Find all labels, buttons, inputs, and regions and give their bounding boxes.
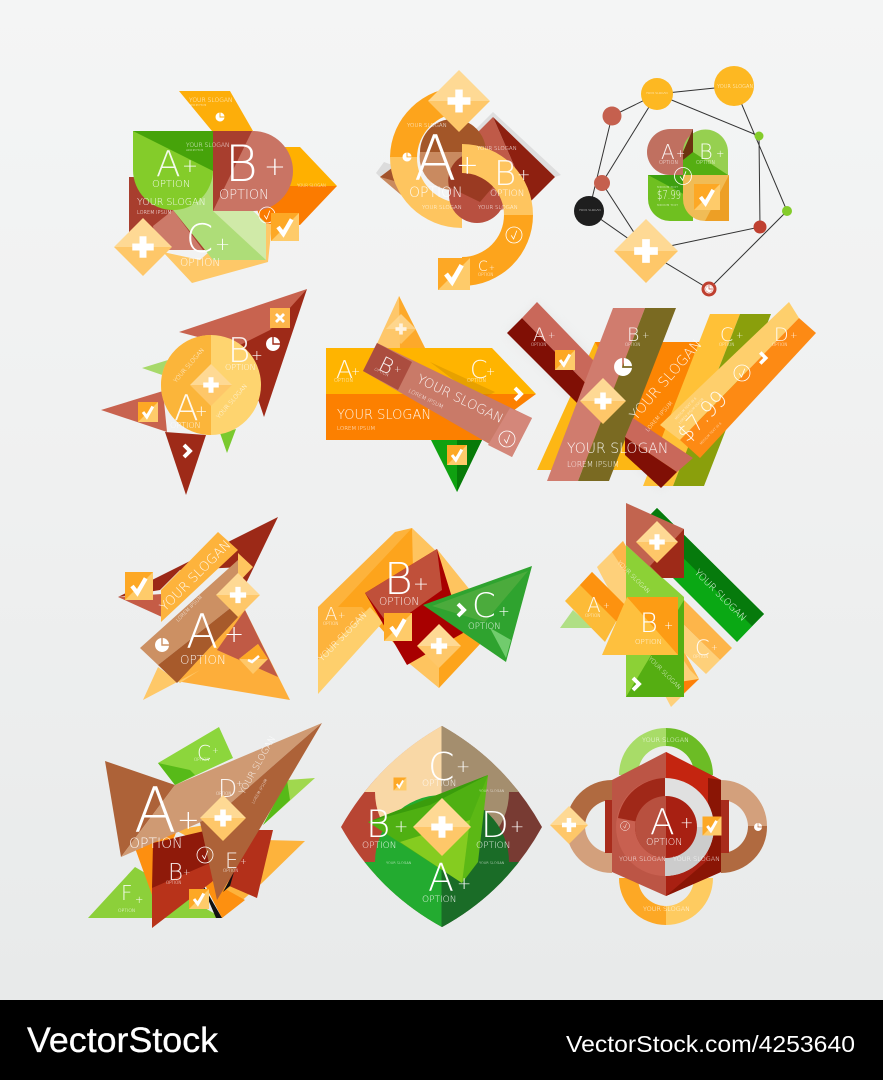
text: rotated slogans xyxy=(616,559,748,691)
shape: red square xyxy=(455,117,555,210)
labels: A+ B+ C+ D+: + xyxy=(642,331,650,341)
labels: A+ B+ C+ D+: + xyxy=(736,331,744,341)
label: B+: + xyxy=(716,149,724,160)
label: B+: B xyxy=(228,331,250,371)
labels: A+ B+ C+ D+: C xyxy=(720,324,733,346)
labels: letters: + xyxy=(236,779,243,788)
text: slogan: YOUR SLOGAN xyxy=(567,441,668,457)
text: slogans: YOUR SLOGAN xyxy=(477,146,517,152)
text: rotated slogans: YOUR SLOGAN xyxy=(692,567,748,624)
label: C+: + xyxy=(486,365,495,378)
shape: inner ring xyxy=(616,778,714,876)
icon: clock xyxy=(706,286,712,292)
strip: A+ back xyxy=(507,302,622,418)
label: A+: A xyxy=(414,122,456,195)
text: main slogan xyxy=(137,197,206,216)
text: small slogans: YOUR SLOGAN xyxy=(386,861,412,865)
ring: right xyxy=(721,780,767,873)
text: slogans xyxy=(407,123,518,211)
icon: chevron xyxy=(184,445,190,457)
text: slogans: YOUR SLOGAN xyxy=(643,905,690,913)
ring: bottom xyxy=(619,878,713,925)
label: A+: A xyxy=(325,604,337,625)
strip: C+ xyxy=(643,314,771,486)
icon: small plus diamond xyxy=(386,314,416,344)
text: green slogan: YOUR SLOGAN xyxy=(186,142,229,149)
labels: letters: + xyxy=(135,895,143,906)
icon: check square xyxy=(394,778,406,790)
text: rotated slogan: YOUR SLOGAN xyxy=(238,735,278,796)
labels: A+ B+ C+ xyxy=(585,593,718,660)
text: slogans: YOUR SLOGAN xyxy=(642,736,689,744)
labels: A+ B+ C+: OPTION xyxy=(635,638,662,646)
label: A+: OPTION xyxy=(659,160,678,166)
icon: check square xyxy=(694,184,720,210)
label: B+: + xyxy=(413,573,429,595)
icon: close square xyxy=(270,308,290,328)
label: C+ xyxy=(180,217,230,269)
label: B+: B xyxy=(225,135,258,193)
labels: A+ B+ C+ D+: OPTION xyxy=(362,841,396,851)
labels: letters: D xyxy=(218,774,237,803)
labels: letters: + xyxy=(212,746,219,755)
label: B+ xyxy=(219,135,286,203)
label: B+: + xyxy=(251,348,263,364)
text: slogans xyxy=(619,736,720,913)
text: node slogans xyxy=(579,84,753,212)
text: price: $7.99 xyxy=(657,188,681,202)
shape: C+ light green xyxy=(173,170,266,260)
text: brand: VectorStock xyxy=(27,1021,219,1060)
label: A+: + xyxy=(224,620,244,648)
labels: letters: + xyxy=(177,805,200,836)
text: rotated slogan: LOREM IPSUM xyxy=(175,595,204,623)
label: A+: A xyxy=(186,605,218,660)
label: A+: A xyxy=(174,388,199,429)
labels: A+ B+ C+ D+: B xyxy=(627,324,639,346)
tag: rotated slogan: LOREM IPSUM xyxy=(407,388,444,411)
label: A+ xyxy=(180,605,244,667)
label: A+: + xyxy=(676,147,685,160)
label: A+: OPTION xyxy=(409,185,463,201)
icon: check square xyxy=(125,572,153,600)
text: rotated slogan: LOREM IPSUM xyxy=(645,401,675,433)
icon: plus diamond xyxy=(636,521,678,563)
shard: B+ xyxy=(152,828,217,928)
text: small slogans: YOUR SLOGAN xyxy=(479,861,505,865)
label: A+: OPTION xyxy=(334,378,353,384)
nodes xyxy=(574,66,792,295)
panel: infographic 3 network xyxy=(574,66,792,295)
tag: rotated slogan xyxy=(363,343,532,457)
text: small slogans: YOUR SLOGAN xyxy=(479,789,505,793)
label: C+: + xyxy=(498,604,510,620)
text: slogans: YOUR SLOGAN xyxy=(619,855,666,863)
panel: infographic 10 shards xyxy=(88,723,322,928)
label: A+: OPTION xyxy=(180,653,226,667)
labels: A+ B+ C+ D+: OPTION xyxy=(772,342,787,347)
labels: letters: F xyxy=(121,881,133,905)
labels: A+ B+ C+ D+: + xyxy=(510,817,524,837)
icon: plus diamond xyxy=(417,624,461,668)
label: C+ xyxy=(467,355,495,384)
tag: rotated slogan: B xyxy=(375,352,398,380)
shape: hexagon xyxy=(612,752,721,896)
labels: letters: OPTION xyxy=(129,836,183,852)
labels: A+ B+ C+ D+: + xyxy=(790,331,798,341)
icon: check square xyxy=(555,350,575,370)
labels: A+ B+ C+ D+: OPTION xyxy=(625,342,640,347)
labels: A+ B+ C+ D+: OPTION xyxy=(422,779,456,789)
label: B+: B xyxy=(699,140,713,164)
text: rotated slogans: YOUR SLOGAN xyxy=(647,655,682,691)
label: B+: + xyxy=(517,165,530,184)
label: A+: + xyxy=(351,365,360,378)
icon: pie xyxy=(155,638,169,652)
panel: infographic 8 diamond and green triangle xyxy=(317,528,532,694)
labels: A+ B+ C+: + xyxy=(711,643,718,652)
icon: circled check xyxy=(620,822,630,830)
labels: A+ B+ C+ D+: OPTION xyxy=(422,895,456,905)
text: main slogan: YOUR SLOGAN xyxy=(137,197,206,208)
text: green slogan: LOREM IPSUM xyxy=(186,148,203,152)
labels: A+ B+ C+: + xyxy=(664,619,673,632)
labels: A+ B+ C+: + xyxy=(603,601,610,610)
icon: check square xyxy=(384,613,412,641)
labels: A+ B+ C+ D+: OPTION xyxy=(719,342,734,347)
label: B+: OPTION xyxy=(225,363,256,372)
labels: letters: + xyxy=(183,868,191,878)
icon: check square xyxy=(138,402,158,422)
shape: red top xyxy=(626,503,684,578)
text: price: MEDIUM TEXT IN 8 xyxy=(699,422,722,446)
label: B+: OPTION xyxy=(379,596,419,608)
text: small slogans xyxy=(386,789,505,865)
label: A+: + xyxy=(680,813,693,832)
icon: plus diamond xyxy=(114,218,172,276)
labels: letters: C xyxy=(197,741,211,765)
labels: letters: OPTION xyxy=(166,880,181,885)
icon: plus diamond xyxy=(190,364,232,406)
labels: A+ B+ C+ D+ xyxy=(362,745,524,905)
label: A+ xyxy=(409,122,479,201)
tag: rotated slogan: YOUR SLOGAN xyxy=(414,372,505,427)
shape: brown circle xyxy=(420,119,486,190)
label: C+: C xyxy=(478,259,488,275)
tag: rotated slogan: + xyxy=(394,365,402,375)
icon: plus diamond xyxy=(413,798,471,856)
text: slogan: LOREM IPSUM xyxy=(567,460,619,469)
label: B+ xyxy=(379,554,429,608)
icon: plus diamond xyxy=(200,795,246,841)
text: top slogan: YOUR SLOGAN xyxy=(189,97,232,104)
labels: A+ B+ C+: OPTION xyxy=(585,613,600,618)
text: price: MEDIUM TEXT xyxy=(657,185,678,189)
panel: infographic 9 diagonal strips xyxy=(560,503,764,707)
labels: A+ B+ C+ D+: D xyxy=(481,805,509,846)
label: A+ xyxy=(659,140,685,166)
label: C+: OPTION xyxy=(478,272,493,277)
panel: infographic 2 swirl xyxy=(376,70,561,290)
icon: plus diamond xyxy=(614,219,678,283)
icon: check square xyxy=(702,816,722,836)
text: slogan: LOREM IPSUM xyxy=(337,426,375,432)
labels: A+ B+ C+ D+: OPTION xyxy=(531,342,546,347)
label: B+: B xyxy=(494,154,516,194)
label: C+: OPTION xyxy=(467,378,486,384)
shape: A+ green xyxy=(133,131,213,210)
shape: green column xyxy=(626,545,684,697)
labels: A+ B+ C+ D+: + xyxy=(394,817,408,837)
label: A+: OPTION xyxy=(170,421,201,430)
panel: infographic 1 arrow and rounded shapes xyxy=(114,91,337,283)
label: A+: + xyxy=(456,150,479,181)
labels: letters: OPTION xyxy=(223,868,238,873)
shape: B+ petal xyxy=(683,130,728,175)
icon: circled check xyxy=(734,365,750,381)
text: arrow slogan: YOUR SLOGAN xyxy=(297,183,326,188)
strip: tan xyxy=(140,560,238,683)
labels: A+ B+ C+ D+: A xyxy=(533,324,546,346)
text: url: VectorStock.com/4253640 xyxy=(566,1031,855,1057)
label: C+: C xyxy=(470,355,487,384)
shard: E+ xyxy=(227,830,273,898)
text: rotated slogans xyxy=(172,347,249,420)
icon: chevron xyxy=(633,678,639,690)
text: rotated slogan: YOUR SLOGAN xyxy=(627,337,706,424)
icon: chevron xyxy=(515,388,521,400)
labels: A+ B+ C+ D+ xyxy=(531,324,798,347)
panel: infographic 12 hexagon rings xyxy=(550,728,767,925)
labels: A+ B+ C+: A xyxy=(587,593,601,617)
label: A+: OPTION xyxy=(152,179,190,190)
icon: circled check xyxy=(197,847,213,863)
text: node slogans: YOUR SLOGAN xyxy=(646,91,668,95)
labels: letters: OPTION xyxy=(194,757,209,762)
text: slogan xyxy=(567,441,668,469)
text: rotated slogans: YOUR SLOGAN xyxy=(215,383,249,420)
text: slogans: YOUR SLOGAN xyxy=(673,855,720,863)
label: A+: OPTION xyxy=(646,837,682,848)
label: A+: OPTION xyxy=(323,621,338,626)
icon: pie xyxy=(403,152,412,161)
label: C+: OPTION xyxy=(468,622,501,632)
label: C+: OPTION xyxy=(180,257,220,269)
labels: letters xyxy=(118,741,247,914)
labels: A+ B+ C+ D+: C xyxy=(428,745,455,789)
text: main slogan: LOREM IPSUM xyxy=(137,210,172,216)
shape: price petal xyxy=(648,175,693,221)
label: B+: + xyxy=(264,152,286,182)
icon: check square xyxy=(189,889,209,909)
label: A+: A xyxy=(336,355,353,384)
shape: central circle xyxy=(161,335,261,435)
label: B+: OPTION xyxy=(490,189,524,199)
icon: check square xyxy=(438,258,470,290)
text: price: MEDIUM TEXT IN 8 xyxy=(674,397,697,421)
shape: green triangle xyxy=(423,566,532,662)
tag: rotated slogan: OPTION xyxy=(374,366,390,378)
icon: chevron xyxy=(458,604,464,616)
panel: infographic 6 crossing strips xyxy=(507,302,816,490)
label: A+ xyxy=(646,802,693,848)
shape: top lobe xyxy=(364,726,519,827)
labels: A+ B+ C+ D+: + xyxy=(457,874,471,894)
icon: plus diamond xyxy=(428,70,490,132)
labels: letters: OPTION xyxy=(216,791,231,796)
labels: A+ B+ C+ D+: A xyxy=(428,856,454,900)
icon: chevron xyxy=(760,352,766,364)
labels: A+ B+ C+: B xyxy=(640,608,658,639)
label: B+: OPTION xyxy=(219,188,269,203)
shape: red square xyxy=(365,549,463,665)
labels: A+ B+ C+ D+: + xyxy=(548,331,556,341)
label: A+: + xyxy=(195,402,208,420)
shape: red circle xyxy=(448,152,505,223)
label: A+: A xyxy=(661,140,675,164)
icon: check square xyxy=(271,213,299,241)
shape: B+ red xyxy=(213,131,293,211)
label: C+: + xyxy=(489,264,495,272)
icon: circled check xyxy=(259,207,275,223)
label: A+: A xyxy=(156,144,181,185)
icon: plus diamond xyxy=(216,573,260,617)
text: price xyxy=(657,185,681,207)
shape: curved diamond base xyxy=(341,726,542,927)
label: C+: C xyxy=(472,586,496,626)
panel: infographic 11 curved diamond xyxy=(341,725,542,929)
label: C+ xyxy=(478,259,495,277)
text: price: MEDIUM TEXT xyxy=(657,203,678,207)
strip: A+ front xyxy=(625,418,693,488)
label: A+: A xyxy=(650,802,675,843)
text: slogans: YOUR SLOGAN xyxy=(407,123,447,129)
label: A+: + xyxy=(182,155,198,177)
label: A+ xyxy=(170,388,208,430)
label: B+ xyxy=(490,154,530,199)
label: B+: B xyxy=(384,554,413,605)
text: slogans: YOUR SLOGAN xyxy=(478,205,518,211)
label: B+: OPTION xyxy=(696,160,715,166)
labels: letters: + xyxy=(240,857,247,866)
label: A+ xyxy=(334,355,360,384)
strip: green slogan xyxy=(630,508,764,642)
text: node slogans: YOUR SLOGAN xyxy=(579,208,601,212)
label: C+: C xyxy=(186,217,213,262)
icon: pie top xyxy=(216,112,224,121)
shape: green triangle xyxy=(368,775,488,883)
labels: A+ B+ C+ D+: OPTION xyxy=(476,841,510,851)
labels: A+ B+ C+ D+: D xyxy=(774,324,789,346)
icon: pie xyxy=(754,823,762,831)
text: rotated slogan: YOUR SLOGAN xyxy=(317,610,369,664)
shape: right S ring xyxy=(462,144,533,286)
text: rotated slogan: LOREM IPSUM xyxy=(251,778,268,804)
network lines xyxy=(589,86,787,289)
shape: inner circle xyxy=(635,796,697,858)
labels: letters: E xyxy=(225,849,238,873)
label: A+: + xyxy=(338,611,346,621)
text: slogans: YOUR SLOGAN xyxy=(422,205,462,211)
labels: letters: A xyxy=(134,774,176,847)
label: B+ xyxy=(696,140,724,166)
shard: A+ triangles xyxy=(105,723,322,900)
text: price: $7.99 xyxy=(673,386,733,447)
strip: B+ xyxy=(547,308,676,481)
strip: A+ xyxy=(565,572,625,642)
strip: D+ xyxy=(660,302,816,458)
labels: A+ B+ C+ D+: + xyxy=(456,757,470,777)
panel: infographic 5 arrow banner xyxy=(326,296,536,492)
shape: left C ring xyxy=(390,87,462,228)
icon: circled check xyxy=(674,168,692,184)
text: price: LOREM IPSUM DOLOR xyxy=(678,397,705,425)
icon: pie xyxy=(614,358,632,376)
label: A+ xyxy=(152,144,198,190)
text: rotated slogans: YOUR SLOGAN xyxy=(616,559,651,595)
labels: A+ B+ C+ D+: B xyxy=(366,803,390,846)
ring: left xyxy=(566,780,612,873)
panel: infographic 7 strip with triangles xyxy=(118,517,290,700)
shape: bottom lobe xyxy=(364,795,519,927)
labels: letters: B xyxy=(168,860,183,886)
icon: check square xyxy=(447,445,467,465)
strip: slogan amber xyxy=(161,532,238,622)
text: slogan xyxy=(337,408,431,432)
shape: B+ xyxy=(602,597,678,655)
text: top slogan: LOREM IPSUM xyxy=(189,103,206,107)
label: C+: + xyxy=(215,234,230,255)
icon: plus diamond xyxy=(550,806,588,844)
ring: top xyxy=(619,728,713,775)
panel: infographic 4 circle with triangles xyxy=(101,289,307,495)
icon: check diamond xyxy=(239,644,268,674)
icon: circled check xyxy=(506,227,522,243)
footer: watermark bar xyxy=(0,1000,883,1080)
label: C+ xyxy=(468,586,510,632)
shape: check petal xyxy=(683,175,729,221)
labels: A+ B+ C+: OPTION xyxy=(693,654,708,659)
text: rotated slogans: YOUR SLOGAN xyxy=(172,347,206,384)
labels: A+ B+ C+: C xyxy=(695,636,710,660)
labels: letters: OPTION xyxy=(118,908,135,914)
label: B+ xyxy=(225,331,263,372)
text: node slogans: YOUR SLOGAN xyxy=(717,84,753,90)
icon: plus diamond xyxy=(580,378,626,424)
text: slogan: YOUR SLOGAN xyxy=(337,408,431,423)
strip: C+ xyxy=(684,600,732,674)
label: A+ xyxy=(323,604,346,626)
shape: A+ petal xyxy=(647,129,693,175)
text: rotated slogan: YOUR SLOGAN xyxy=(157,538,234,615)
icon: pie xyxy=(266,337,280,351)
